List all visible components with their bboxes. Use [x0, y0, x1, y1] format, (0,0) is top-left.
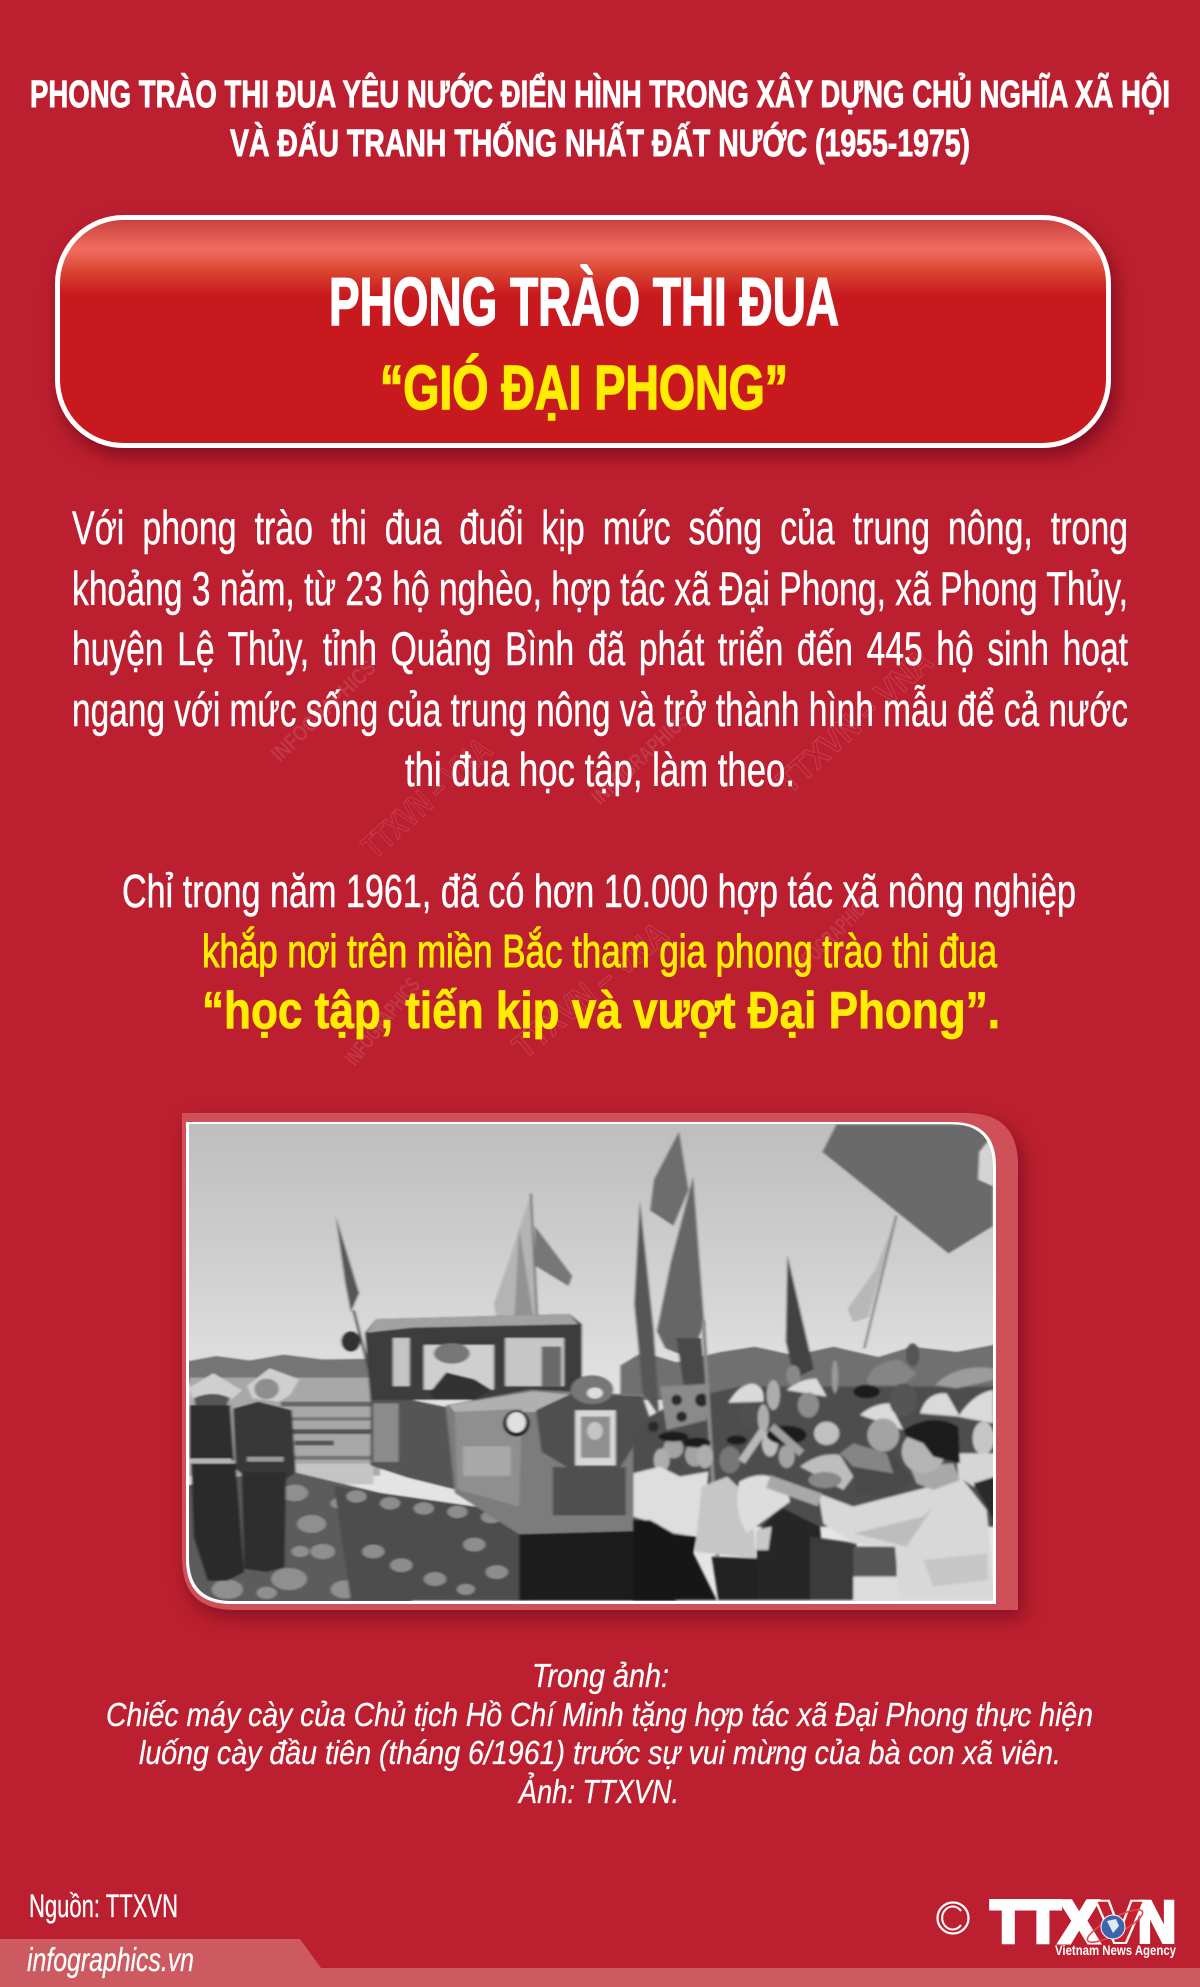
paragraph 2: “học tập, tiến kịp và vượt Đại Phong”.: [202, 982, 1000, 1040]
logo tagline: Vietnam News Agency: [1055, 1942, 1176, 1958]
crowd lower clothing: [633, 1467, 708, 1535]
crowd: [633, 1320, 1000, 1602]
watermarks: [266, 642, 940, 1070]
paragraph 2: [122, 865, 1076, 1040]
photo: tractor and crowd: [189, 1124, 993, 1601]
left farmers: [189, 1368, 299, 1581]
title: [30, 71, 1170, 165]
TTXVN logo: V: [1097, 1890, 1143, 1955]
copyright icon: [938, 1902, 968, 1934]
tractor: [334, 1314, 676, 1601]
title: VÀ ĐẤU TRANH THỐNG NHẤT ĐẤT NƯỚC (1955-1975): [230, 120, 970, 165]
paragraph 1: thi đua học tập, làm theo.: [405, 743, 795, 796]
watermarks: TTXVN – VNA: [770, 642, 940, 801]
watermarks: INFOGRAPHICS: [266, 655, 381, 767]
watermarks: TTXVN – VNA: [355, 731, 499, 866]
headline pill: [58, 218, 1116, 456]
headline line 2: “GIÓ ĐẠI PHONG”: [380, 354, 788, 423]
watermarks: INFOGRAPHICS: [339, 973, 425, 1070]
paragraph 1: [72, 501, 1128, 796]
caption: luống cày đầu tiên (tháng 6/1961) trước sự vui mừng của bà con xã viên.: [139, 1734, 1061, 1771]
TTXVN logo: N: [1138, 1890, 1176, 1955]
photo frame: [160, 1111, 1040, 1618]
TTXVN logo: [991, 1890, 1176, 1958]
headline line 1: PHONG TRÀO THI ĐUA: [329, 264, 839, 340]
footer band: [0, 1939, 1200, 1987]
crowd hands: [654, 1343, 919, 1473]
flags: [336, 1124, 993, 1417]
man in white shirt: [818, 1476, 995, 1600]
logo globe: [1084, 1904, 1146, 1948]
caption: [106, 1657, 1093, 1810]
TTXVN logo: TTX: [991, 1890, 1098, 1955]
caption: Trong ảnh:: [532, 1657, 669, 1694]
crowd helmets: [728, 1378, 993, 1430]
watermarks: TTXVN – VNA: [506, 915, 676, 1066]
source: Nguồn: TTXVN: [29, 1888, 178, 1924]
website label: infographics.vn: [27, 1941, 194, 1978]
watermarks: INFOGRAPHICS: [787, 891, 877, 981]
caption: Ảnh: TTXVN.: [517, 1772, 679, 1810]
watermarks: INFOGRAPHICS: [586, 706, 695, 810]
